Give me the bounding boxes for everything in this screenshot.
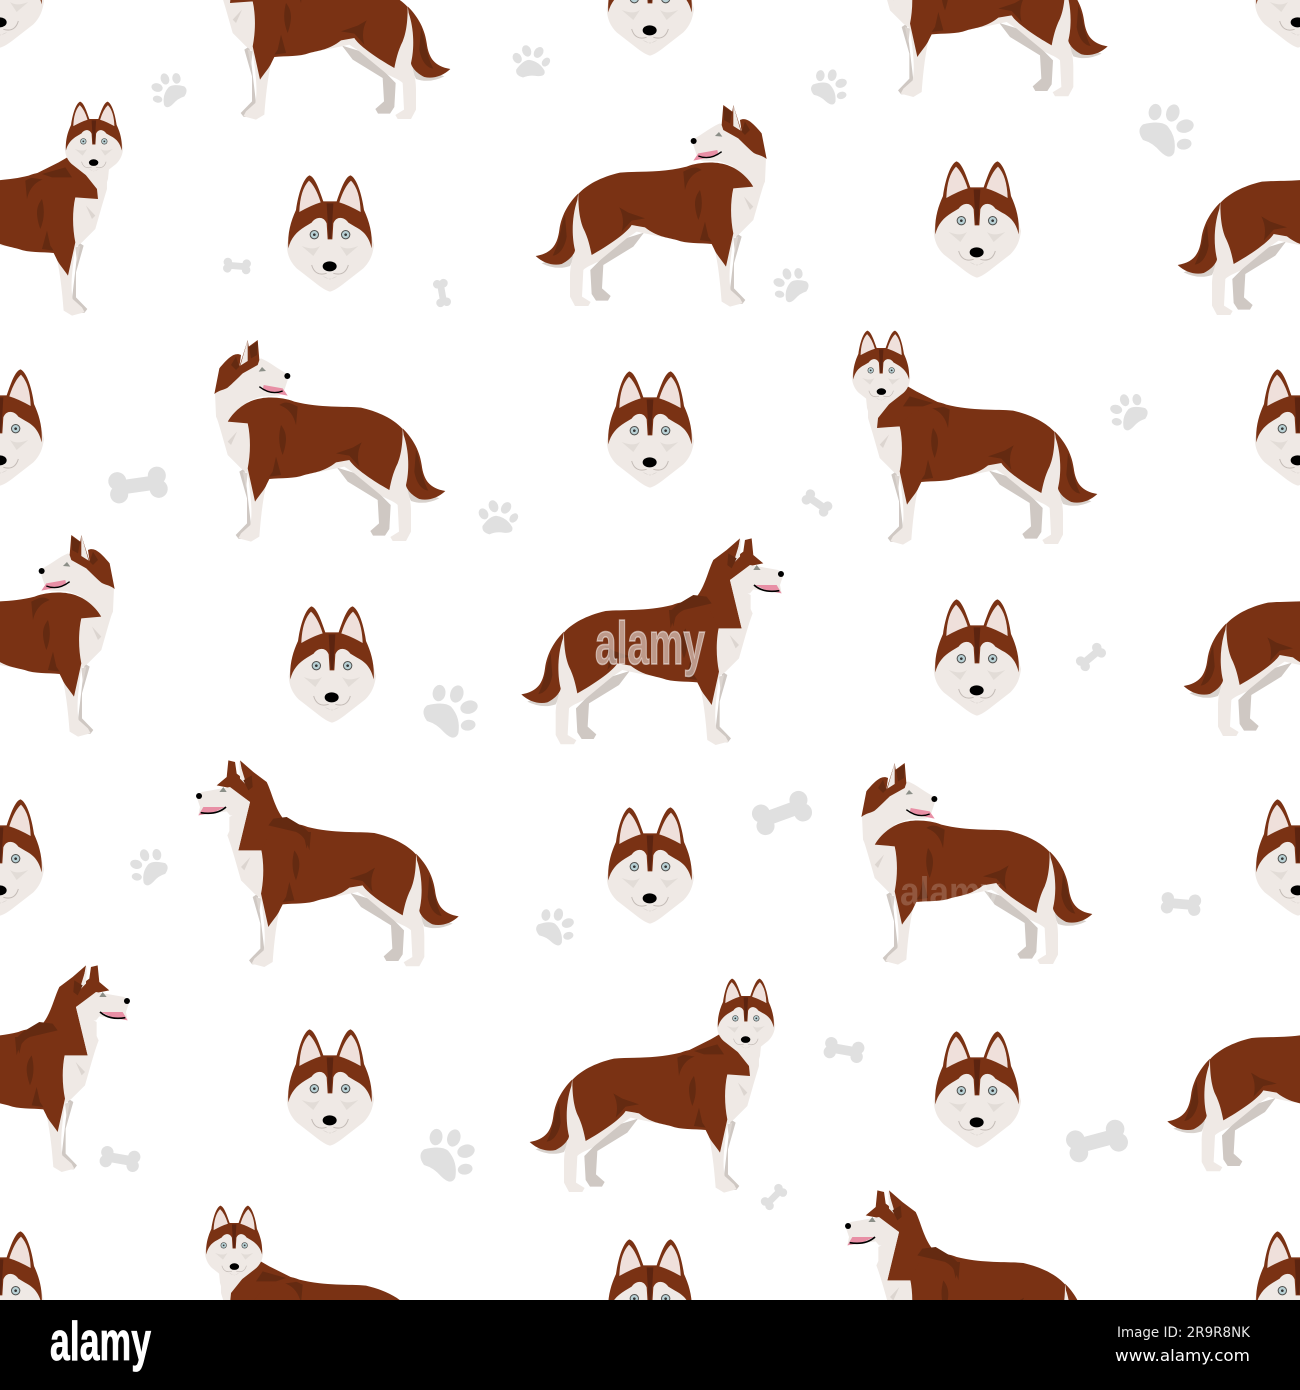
faint watermark on right dog: alamy <box>900 870 1001 914</box>
standing dogs looking back <box>0 105 1300 965</box>
watermark on central dog: alamy <box>595 610 705 677</box>
website: www.alamy.com <box>1115 1346 1250 1365</box>
image id: Image ID: 2R9R8NK <box>1117 1325 1251 1341</box>
paw prints <box>129 36 1195 1182</box>
footer bar <box>0 1300 1300 1390</box>
footer logo: alamy <box>50 1310 151 1372</box>
bones <box>99 257 1202 1212</box>
